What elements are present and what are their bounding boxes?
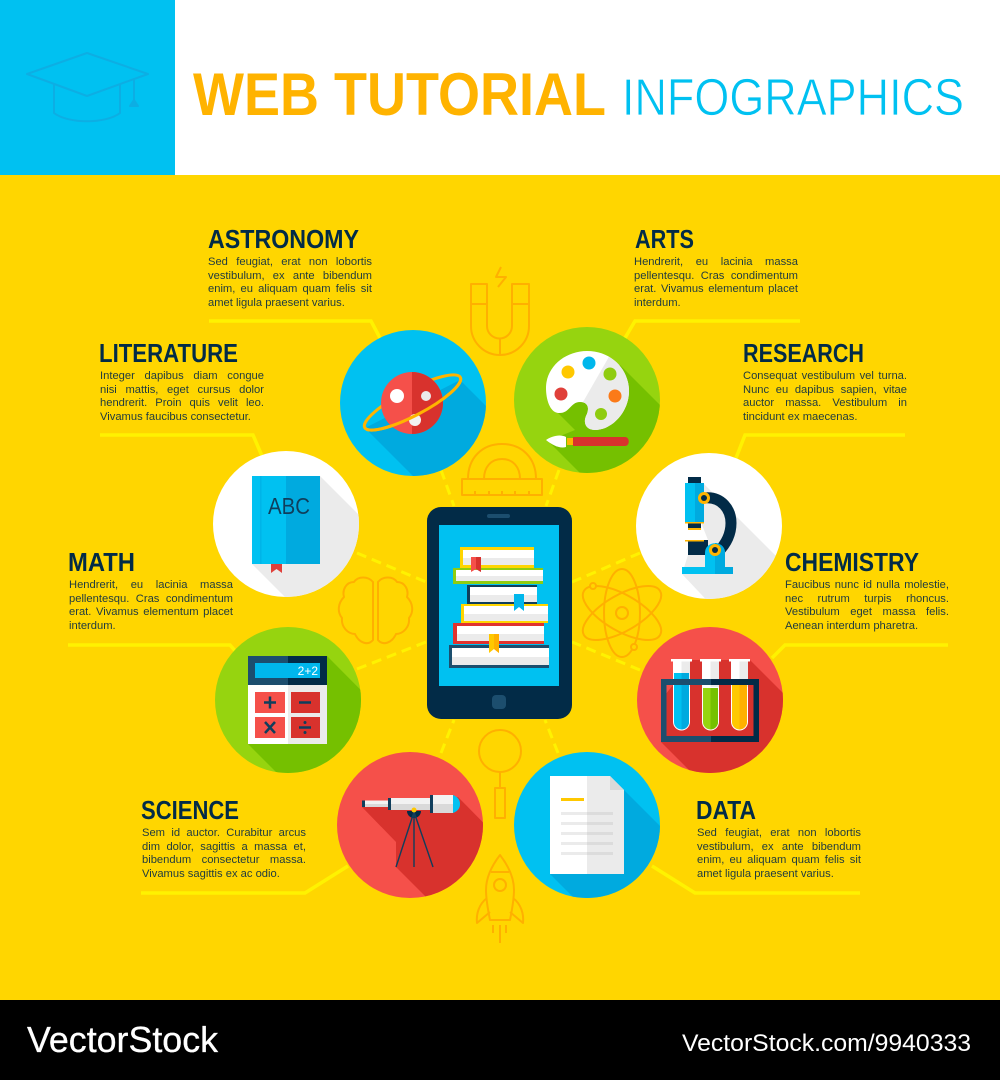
panel: arts: [634, 224, 798, 308]
panel: science: Sem id auctor. Curabitur arcus: [142, 827, 306, 839]
panel: math: erat. Vivamus elementum placet: [69, 606, 233, 618]
panel: science: dim dolor, sagittis a massa et,: [142, 840, 306, 852]
panel: astronomy: [208, 224, 372, 308]
panel: science: SCIENCE: [141, 795, 239, 825]
dashed connectors to tablet: [357, 470, 640, 753]
panel: data: DATA: [696, 795, 756, 825]
panel: arts: Hendrerit, eu lacinia massa: [634, 256, 798, 268]
panel: math: [68, 547, 233, 632]
panel: arts: ARTS: [635, 224, 694, 254]
background line icons: [339, 267, 669, 943]
panel: chemistry: nec rutrum turpis rhoncus.: [785, 592, 949, 604]
icon: magnet: [471, 267, 529, 355]
icon: protractor: [462, 444, 542, 495]
icon: graduation cap: [27, 53, 148, 121]
test tube: yellow: [729, 659, 750, 730]
panel: research: Nunc eu dapibus sapien, vitae: [743, 384, 907, 396]
panel: astronomy: ASTRONOMY: [208, 224, 359, 254]
panel: astronomy: Sed feugiat, erat non lobortis: [208, 256, 372, 268]
footer bar: VectorStock: [27, 1019, 219, 1060]
panel: research: tincidunt ex maecenas.: [743, 410, 857, 422]
circle: math: 2+2: [298, 664, 318, 678]
panel: research: [743, 338, 907, 422]
circle: chemistry: [637, 627, 783, 773]
icon: magnifier: [479, 730, 521, 818]
panel: math: pellentesqu. Cras condimentum: [69, 592, 233, 604]
panel: literature: nisi mattis, eget cursus dolor: [100, 384, 264, 396]
panel: data: Sed feugiat, erat non lobortis: [697, 827, 861, 839]
circle: astronomy: [340, 330, 486, 476]
panel: chemistry: [785, 547, 949, 632]
footer bar: VectorStock.com/9940333: [682, 1030, 971, 1057]
panel: science: [141, 795, 306, 880]
panel: science: bibendum consectetur massa.: [142, 854, 306, 866]
footer bar: [0, 1000, 1000, 1080]
icon: atom: [575, 569, 669, 657]
test tube: green: [700, 659, 721, 730]
panel: math: MATH: [68, 547, 135, 577]
panel: literature: LITERATURE: [99, 338, 238, 368]
yellow background: [0, 175, 1000, 1000]
header band: [0, 0, 1000, 175]
panel: chemistry: Faucibus nunc id nulla molestie,: [785, 579, 949, 591]
panel: chemistry: Vestibulum eget massa felis.: [785, 606, 949, 618]
icon: rocket: [477, 855, 523, 943]
panel: arts: erat. Vivamus elementum placet: [634, 283, 798, 295]
circle: math: [215, 627, 361, 773]
panel: data: vestibulum, ex ante bibendum: [697, 840, 861, 852]
panel: astronomy: enim, eu aliquam quam felis sit: [208, 283, 372, 295]
panel: research: RESEARCH: [743, 338, 864, 368]
panel: science: Vivamus sagittis ex ac odio.: [142, 868, 280, 880]
test tube: blue: [671, 659, 692, 730]
circle: literature: [213, 451, 359, 597]
panel: research: auctor massa. Vestibulum in: [743, 397, 907, 409]
circle: literature: ABC: [268, 493, 310, 519]
panel: research: Consequat vestibulum vel turna.: [743, 370, 907, 382]
circle: research: [636, 453, 782, 599]
panel: literature: Integer dapibus diam congue: [100, 370, 264, 382]
panel: data: [696, 795, 861, 880]
panel: chemistry: Aenean interdum pharetra.: [785, 620, 918, 632]
panel: literature: [99, 338, 264, 422]
panel: literature: Vivamus faucibus consectetur.: [100, 410, 251, 422]
icon: brain: [339, 578, 412, 643]
panel: math: Hendrerit, eu lacinia massa: [69, 579, 233, 591]
tablet: [427, 507, 572, 719]
connector lines: [68, 321, 948, 893]
circle: science: [337, 752, 483, 898]
circle: arts: [514, 327, 660, 473]
stack of books: [449, 547, 549, 668]
panel: data: amet ligula praesent varius.: [697, 868, 834, 880]
panel: math: interdum.: [69, 620, 116, 632]
title: [193, 61, 964, 128]
panel: astronomy: vestibulum, ex ante bibendum: [208, 270, 372, 282]
title: WEB TUTORIAL: [193, 61, 606, 128]
panel: literature: hendrerit. Proin quis velit leo.: [100, 397, 264, 409]
panel: arts: pellentesqu. Cras condimentum: [634, 270, 798, 282]
panel: data: enim, eu aliquam quam felis sit: [697, 854, 861, 866]
panel: astronomy: amet ligula praesent varius.: [208, 296, 345, 308]
panel: arts: interdum.: [634, 296, 681, 308]
panel: chemistry: CHEMISTRY: [785, 547, 919, 577]
circle: data: [514, 752, 660, 898]
